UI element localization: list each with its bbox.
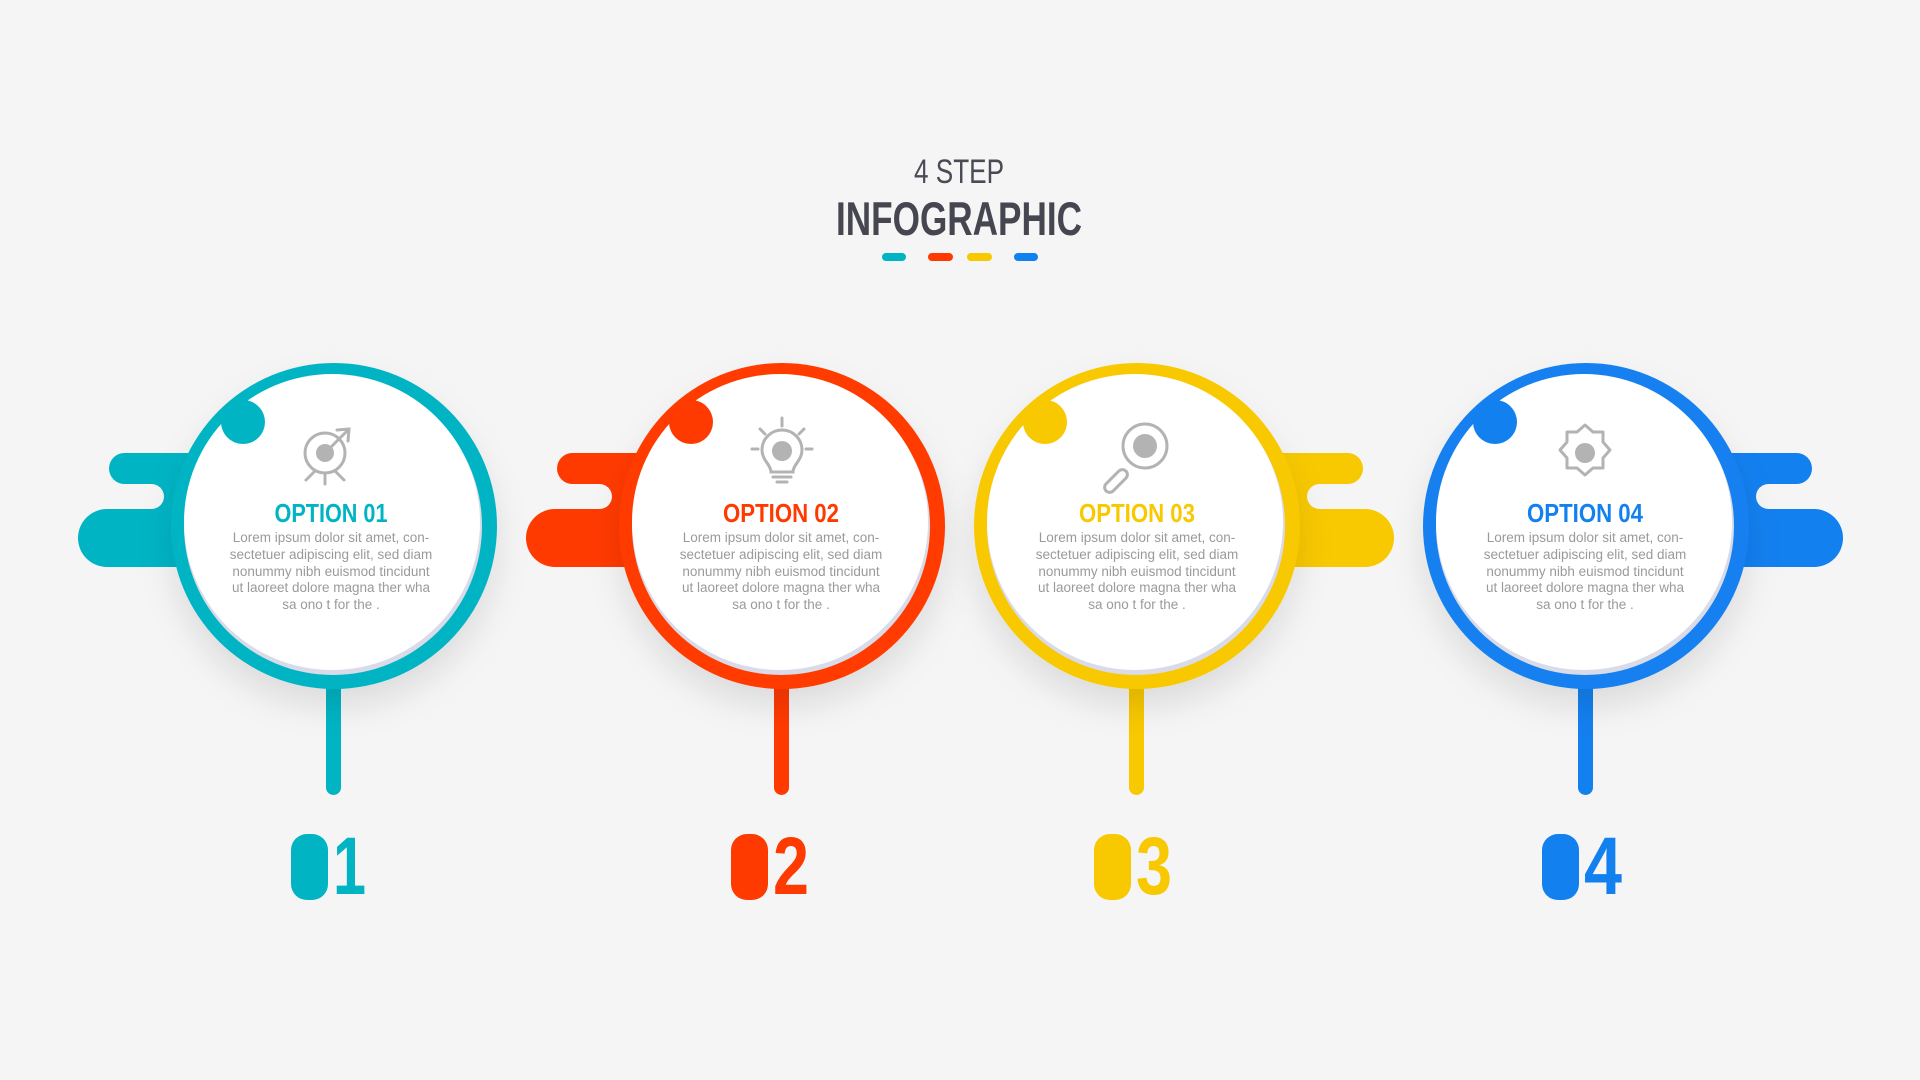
body 04: ut laoreet dolore magna ther wha [1486,580,1685,595]
body 01: sa ono t for the . [282,597,380,612]
icon: magnifier [1103,424,1167,494]
heading 01: OPTION 01 [274,498,388,528]
dot 02 [669,400,713,444]
number 01: 1 [333,821,366,912]
panel: option 04 [1423,363,1843,912]
color dashes [882,253,1038,261]
tabs 01 [78,453,291,567]
body 04 [1484,530,1686,612]
body 04: Lorem ipsum dolor sit amet, con- [1487,530,1683,545]
body 04: sa ono t for the . [1536,597,1634,612]
circle 01 [171,363,497,689]
heading 03: OPTION 03 [1079,498,1195,528]
title: INFOGRAPHIC [836,192,1082,245]
title: 4 STEP [914,153,1004,191]
tabs 03 [1181,453,1394,567]
stem 02 [774,675,789,795]
body 01: nonummy nibh euismod tincidunt [232,564,430,579]
body 03: nonummy nibh euismod tincidunt [1038,564,1236,579]
body 01: Lorem ipsum dolor sit amet, con- [233,530,429,545]
tabs 02 [526,453,739,567]
stem 04 [1578,675,1593,795]
circle 03 [974,363,1300,689]
number 02 [731,821,809,912]
number 01 [291,821,366,912]
body 03: Lorem ipsum dolor sit amet, con- [1039,530,1235,545]
panel: option 03 [974,363,1394,912]
panel: option 01 [78,363,497,912]
body 02: Lorem ipsum dolor sit amet, con- [683,530,879,545]
number 03 [1094,821,1172,912]
stem 01 [326,675,341,795]
body 01: ut laoreet dolore magna ther wha [232,580,431,595]
body 03: sa ono t for the . [1088,597,1186,612]
body 04: nonummy nibh euismod tincidunt [1486,564,1684,579]
body 03 [1036,530,1238,612]
heading 02: OPTION 02 [723,498,839,528]
body 02 [680,530,882,612]
heading 04: OPTION 04 [1527,498,1643,528]
body 01: sectetuer adipiscing elit, sed diam [230,547,432,562]
number 02: 2 [773,821,809,912]
body 03: ut laoreet dolore magna ther wha [1038,580,1237,595]
body 02: sectetuer adipiscing elit, sed diam [680,547,882,562]
number 04: 4 [1584,821,1622,912]
panel: option 02 [526,363,945,912]
number 03: 3 [1136,821,1172,912]
body 03: sectetuer adipiscing elit, sed diam [1036,547,1238,562]
body 02: sa ono t for the . [732,597,830,612]
body 04: sectetuer adipiscing elit, sed diam [1484,547,1686,562]
title [836,153,1082,245]
circle 04 [1423,363,1749,689]
dot 03 [1023,400,1067,444]
icon: gear [1560,425,1610,475]
circle 02 [619,363,945,689]
body 01 [230,530,432,612]
icon: target [305,429,349,484]
body 02: nonummy nibh euismod tincidunt [682,564,880,579]
stem 03 [1129,675,1144,795]
body 02: ut laoreet dolore magna ther wha [682,580,881,595]
dot 01 [221,400,265,444]
dot 04 [1473,400,1517,444]
tabs 04 [1630,453,1843,567]
icon: bulb [752,418,812,482]
number 04 [1542,821,1622,912]
